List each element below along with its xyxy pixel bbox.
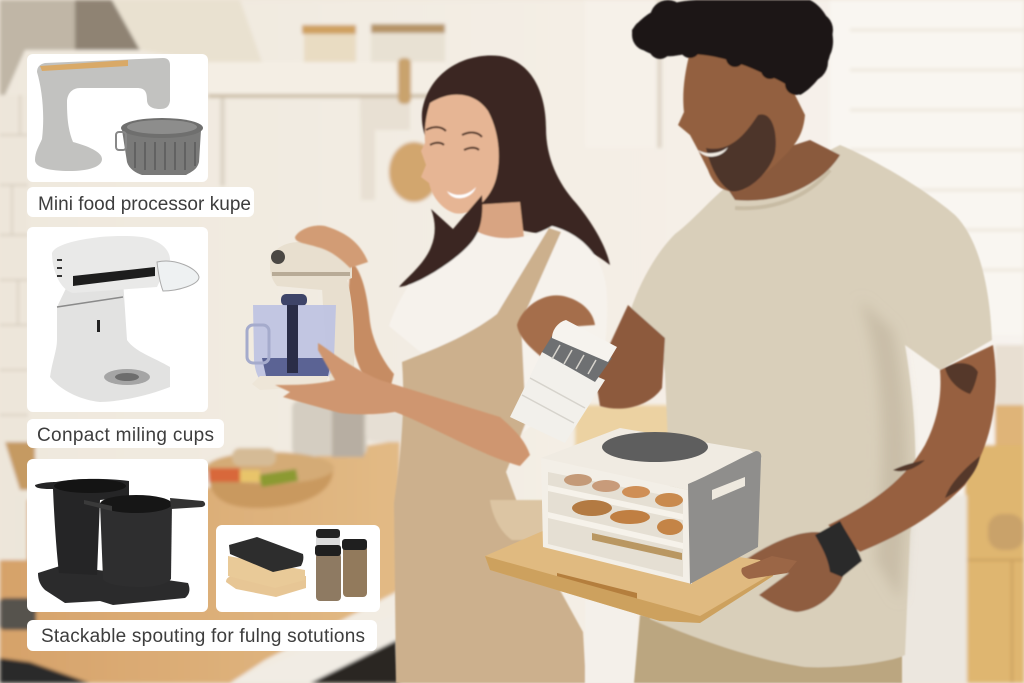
- food processor held by woman: [247, 242, 354, 401]
- panel: boxes and spice jars: [216, 525, 380, 612]
- woman hands and forearm: [275, 225, 530, 466]
- man hand on cylinder: [517, 295, 595, 359]
- cutting board: [485, 530, 773, 623]
- watch: [815, 521, 862, 577]
- man arm right: [828, 345, 996, 552]
- label: stackable spouting: Stackable spouting for fulng sotutions: [41, 626, 365, 647]
- grinder cylinder: [510, 320, 617, 443]
- label: mini food processor: [27, 187, 254, 217]
- neck and face: [472, 202, 524, 260]
- man hair: [632, 0, 833, 95]
- hair front lock: [399, 195, 482, 287]
- shirt shading: [860, 300, 908, 600]
- icon: grey bowl: [122, 130, 201, 175]
- woman arm upper: [349, 262, 394, 404]
- label: stackable spouting: [27, 620, 377, 651]
- man arm left: [595, 305, 665, 409]
- woman: [349, 55, 637, 683]
- panel: stackable cups: [27, 459, 208, 612]
- pants: [634, 615, 902, 683]
- panel: mini food processor: [27, 54, 208, 182]
- man: [517, 0, 996, 683]
- man head: [715, 140, 840, 201]
- man fingers over board: [741, 556, 797, 579]
- icon: stand mixer grey: [35, 58, 170, 171]
- apron: [394, 228, 586, 683]
- label: compact cups: Conpact miling cups: [37, 425, 214, 446]
- label: compact cups: [27, 419, 224, 448]
- label: mini food processor: Mini food processor kupe: [38, 194, 251, 215]
- storage device: [541, 428, 762, 584]
- panel: stand mixer: [27, 227, 208, 412]
- white shirt: [389, 226, 607, 446]
- man hand on board: [744, 532, 847, 612]
- t-shirt: [625, 145, 992, 667]
- hair back: [422, 55, 610, 265]
